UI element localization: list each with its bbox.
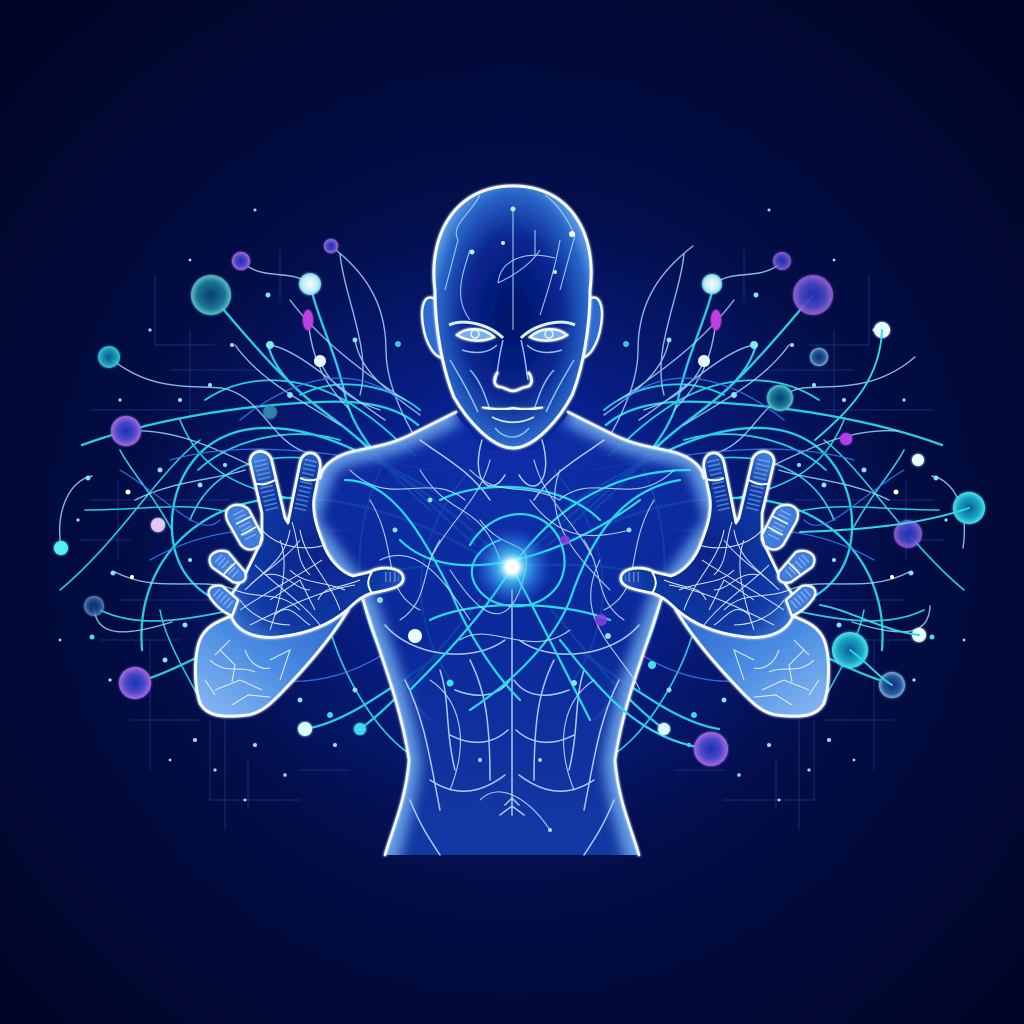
purple chest accents bbox=[560, 535, 607, 626]
pale wires bbox=[60, 246, 420, 632]
head vein lines bbox=[445, 195, 575, 330]
cyan wires bbox=[60, 284, 512, 760]
face contours bbox=[450, 340, 574, 437]
back wires mirrored bbox=[60, 246, 512, 760]
palm veins bbox=[235, 522, 360, 630]
blue wires bbox=[120, 378, 430, 681]
torso muscles bbox=[385, 440, 639, 855]
left nodes and bubbles bbox=[54, 239, 366, 736]
chest particles bbox=[377, 498, 656, 832]
head bbox=[422, 186, 602, 448]
lower lip bbox=[492, 417, 534, 422]
chest wires bbox=[345, 460, 711, 830]
small particles right bbox=[623, 208, 965, 802]
nose bbox=[494, 372, 532, 391]
body halo bbox=[122, 210, 902, 850]
small particles left bbox=[59, 208, 401, 802]
brows bbox=[449, 322, 575, 338]
forearm bbox=[196, 610, 348, 716]
ears bbox=[422, 298, 444, 358]
back wires right bbox=[512, 246, 964, 760]
palm and two raised fingers bbox=[228, 452, 403, 637]
finger four bbox=[210, 551, 246, 583]
finger three bbox=[226, 505, 262, 550]
torso bbox=[305, 412, 719, 870]
right arm and hand bbox=[621, 452, 828, 716]
finger five bbox=[209, 586, 238, 616]
right nodes and bubbles bbox=[658, 252, 985, 766]
right outer wires bbox=[800, 330, 969, 685]
circuit grid left bbox=[80, 250, 350, 830]
bubble large teal bbox=[191, 275, 231, 315]
circuit grid right bbox=[674, 250, 944, 830]
torso outline bbox=[320, 412, 704, 855]
forearm lines bbox=[205, 640, 290, 705]
head nodes bbox=[470, 206, 575, 274]
eyes bbox=[457, 329, 567, 341]
finger texture bbox=[260, 460, 399, 577]
mouth bbox=[482, 407, 543, 409]
left arm and hand bbox=[196, 452, 403, 716]
central energy core bbox=[472, 527, 552, 607]
torso inner edge glow bbox=[305, 413, 719, 870]
finger joints bbox=[254, 478, 372, 593]
bubble large purple bbox=[793, 275, 833, 315]
skull and jaw bbox=[434, 186, 591, 448]
